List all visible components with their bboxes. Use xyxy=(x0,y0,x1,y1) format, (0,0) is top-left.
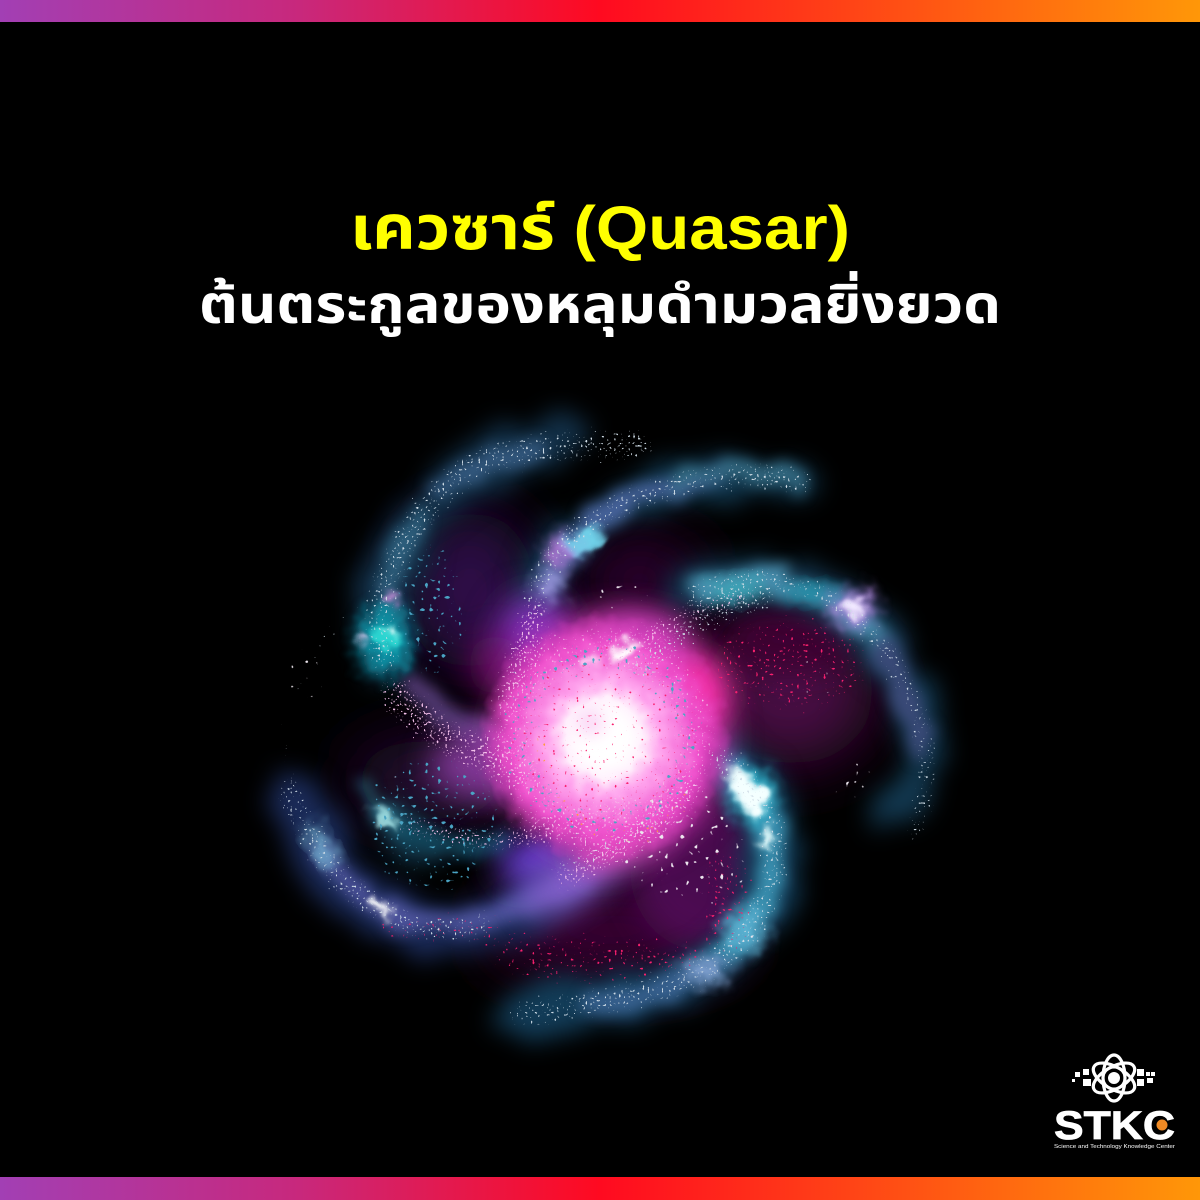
icon: orange dot xyxy=(1156,1120,1168,1130)
logo: STKC xyxy=(1054,1055,1175,1150)
logo wordmark: STKC xyxy=(1054,1104,1175,1148)
icon: atom network xyxy=(1072,1055,1155,1101)
spiral arms: outer halo xyxy=(291,438,923,1012)
subtitle: ต้นตระกูลของหลุมดำมวลยิ่งยวด xyxy=(199,271,1001,337)
scattered star speckles xyxy=(269,445,925,1012)
logo tagline: Science and Technology Knowledge Center xyxy=(1054,1144,1175,1150)
dark haze between the arms xyxy=(350,510,875,978)
spiral arms: inner colour xyxy=(318,448,920,1005)
bright star-forming knots xyxy=(303,523,875,983)
orange specks xyxy=(539,710,695,836)
pink and red specks xyxy=(356,466,876,990)
bottom gradient bar xyxy=(0,1177,1200,1200)
violet inner clouds xyxy=(430,594,627,930)
top gradient bar xyxy=(0,0,1200,22)
galaxy illustration xyxy=(269,438,925,1012)
fine pale specks along the arms xyxy=(282,445,925,1012)
larger white dots xyxy=(269,564,884,964)
blue and teal dots xyxy=(311,534,689,899)
bright galactic core xyxy=(479,613,729,884)
title: เควซาร์ (Quasar) xyxy=(350,194,850,262)
pale pink dust xyxy=(395,595,750,880)
